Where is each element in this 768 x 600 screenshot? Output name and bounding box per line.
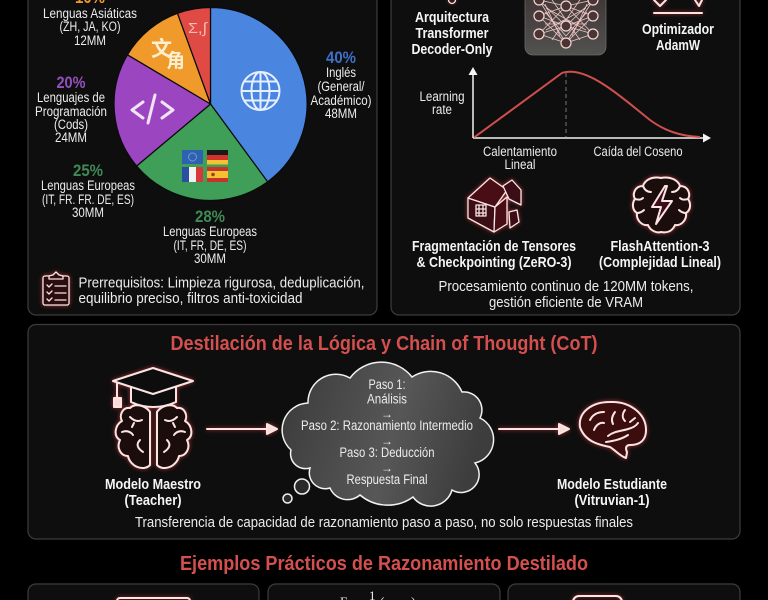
cloud steps text: → <box>381 434 393 448</box>
card background two <box>268 584 500 600</box>
x axis labels: Caída del Coseno <box>594 144 682 159</box>
label: 25 percent European languages: 25% <box>73 161 103 180</box>
label: 28 percent European languages: Lenguas Europeas <box>163 224 257 239</box>
label: student model <box>557 476 667 509</box>
heading: distillation: Destilación de la Lógica y Chain of Thought (CoT) <box>170 333 598 355</box>
heading: FlashAttention: (Complejidad Lineal) <box>599 254 721 271</box>
label: 28 percent European languages: 28% <box>195 207 225 226</box>
x axis labels: Lineal <box>504 157 536 172</box>
icon: optimizer <box>654 0 702 13</box>
cloud steps text: → <box>381 461 393 475</box>
cloud steps text: Paso 3: Deducción <box>340 445 434 460</box>
label: teacher model: (Teacher) <box>124 492 182 509</box>
heading: tensor sharding: Fragmentación de Tensores <box>412 238 576 255</box>
label: 40 percent English: (General/ <box>318 79 365 94</box>
text block: prerequisites <box>78 274 364 307</box>
heading: decoder-only architecture <box>412 9 493 58</box>
y axis label: rate <box>432 102 452 117</box>
panel background right <box>391 0 740 315</box>
heading: tensor sharding <box>412 238 576 271</box>
card background one <box>28 584 259 600</box>
heading: FlashAttention <box>599 238 721 271</box>
label: 40 percent English: Inglés <box>326 65 356 80</box>
label: teacher model: Modelo Maestro <box>105 476 201 493</box>
x axis labels <box>483 144 682 172</box>
chart axes <box>468 67 711 142</box>
icon: teacher brain with cap <box>113 368 193 468</box>
label: 25 percent European languages <box>41 161 135 220</box>
x axis labels: Calentamiento <box>483 144 557 159</box>
label: 20 percent programming languages: Lenguajes de <box>37 90 105 105</box>
arrow: teacher to chain of thought <box>207 424 277 434</box>
icon: European flags <box>182 150 228 182</box>
label: 25 percent European languages: 30MM <box>72 205 104 220</box>
cloud steps text: Análisis <box>367 392 407 406</box>
panel: training architecture <box>391 0 740 315</box>
formula <box>340 588 416 600</box>
label: 40 percent English <box>310 48 372 121</box>
panel: logic distillation <box>28 324 740 539</box>
thought cloud <box>282 362 494 506</box>
icon: architecture node <box>448 0 456 4</box>
label: student model: (Vitruvian-1) <box>574 492 650 509</box>
cloud steps text <box>301 377 473 487</box>
label: 28 percent European languages <box>163 207 257 266</box>
y axis label: Learning <box>420 89 464 104</box>
cloud steps text: → <box>381 407 393 421</box>
cloud steps text: Paso 1: <box>368 377 406 392</box>
y axis label <box>420 89 464 117</box>
icon: example three device <box>573 596 622 600</box>
thought bubbles <box>283 479 310 503</box>
icon: CJK characters: 文 <box>151 37 172 61</box>
label: 20 percent programming languages: 24MM <box>55 130 87 145</box>
heading: decoder-only architecture: Arquitectura <box>415 9 490 26</box>
cloud steps text: Paso 2: Razonamiento Intermedio <box>301 418 473 433</box>
arrow: chain of thought to student <box>499 424 569 434</box>
card: example three <box>508 584 740 600</box>
label: 25 percent European languages: (IT, FR. FR. DE, ES) <box>42 192 134 207</box>
label: teacher model <box>105 476 201 509</box>
label: 20 percent programming languages: Programación <box>35 104 107 119</box>
panel: dataset composition <box>28 0 377 315</box>
label: 40 percent English: 40% <box>326 48 356 67</box>
text block: token processing <box>438 278 694 311</box>
card background three <box>508 584 740 600</box>
cloud shape <box>282 362 494 506</box>
label: 25 percent European languages: Lenguas Europeas <box>41 178 135 193</box>
caption: reasoning transfer: Transferencia de capacidad de razonamiento paso a paso, no solo respuestas finales <box>135 514 633 531</box>
heading: AdamW optimizer: AdamW <box>656 37 701 54</box>
pie chart <box>114 7 307 200</box>
label: 28 percent European languages: (IT, FR, DE, ES) <box>174 238 246 253</box>
heading: tensor sharding: & Checkpointing (ZeRO-3) <box>416 254 572 271</box>
icon: clipboard checklist <box>43 272 69 305</box>
label: 10 percent Asian languages: (ZH, JA, KO) <box>60 19 120 34</box>
icon: CJK characters <box>151 37 185 72</box>
chart: learning rate schedule <box>420 67 711 172</box>
icon: fragmented cube <box>468 178 521 232</box>
heading: FlashAttention: FlashAttention-3 <box>610 238 710 255</box>
label: 20 percent programming languages: 20% <box>56 73 86 92</box>
heading: decoder-only architecture: Decoder-Only <box>412 41 493 58</box>
panel background middle <box>28 324 740 539</box>
card: example one <box>28 584 259 600</box>
heading: AdamW optimizer: Optimizador <box>642 21 714 38</box>
label: 10 percent Asian languages: Lenguas Asiáticas <box>43 6 137 21</box>
label: 40 percent English: 48MM <box>325 106 357 121</box>
label: 10 percent Asian languages <box>43 0 137 48</box>
text block: prerequisites: equilibrio preciso, filtros anti-toxicidad <box>78 290 302 307</box>
card: example two <box>268 584 500 600</box>
learning rate curve <box>474 72 700 138</box>
heading: practical examples: Ejemplos Prácticos de Razonamiento Destilado <box>180 553 588 575</box>
label: student model: Modelo Estudiante <box>557 476 667 493</box>
icon: globe <box>242 72 280 110</box>
icon: example one window <box>117 598 190 600</box>
text block: prerequisites: Prerrequisitos: Limpieza rigurosa, deduplicación, <box>78 274 364 292</box>
cloud steps text: Respuesta Final <box>346 472 428 487</box>
icon: code brackets <box>132 95 173 123</box>
text block: token processing: Procesamiento continuo de 120MM tokens, <box>438 278 694 295</box>
icon: CJK characters: 角 <box>166 49 185 72</box>
heading: decoder-only architecture: Transformer <box>416 25 489 42</box>
panel background left <box>28 0 377 315</box>
label: 20 percent programming languages <box>35 73 107 145</box>
heading: AdamW optimizer <box>642 21 714 54</box>
label: 20 percent programming languages: (Cods) <box>54 117 88 132</box>
icon: student brain <box>580 402 646 458</box>
label: 28 percent European languages: 30MM <box>194 251 226 266</box>
icon: neural network <box>525 0 606 55</box>
icon: math symbols: Σ,∫ <box>188 20 209 37</box>
text block: token processing: gestión eficiente de VRAM <box>489 294 643 311</box>
label: 10 percent Asian languages: 12MM <box>74 33 106 48</box>
icon: brain with lightning bolt <box>633 177 690 232</box>
label: 40 percent English: Académico) <box>310 93 372 108</box>
